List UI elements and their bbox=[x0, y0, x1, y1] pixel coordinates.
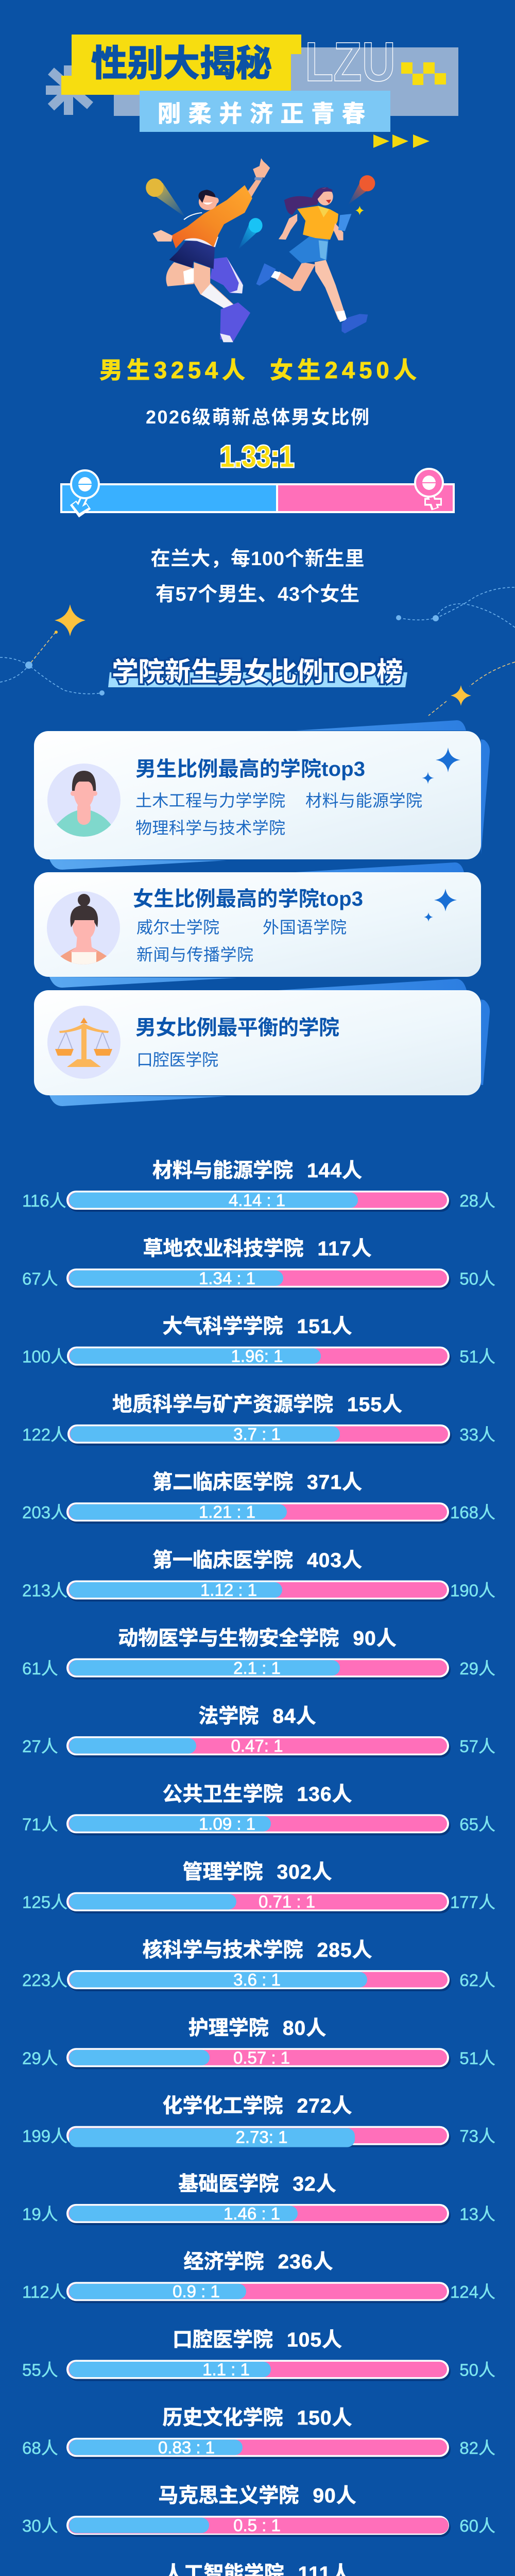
college row: 口腔医学院 bbox=[22, 2329, 495, 2381]
subhead: overall ratio label: 2026级萌新总体男女比例 bbox=[146, 406, 369, 428]
gender bar bbox=[66, 2126, 451, 2147]
male count: 19人 bbox=[22, 2205, 58, 2224]
pin: red bbox=[348, 175, 375, 205]
female count: 51人 bbox=[459, 1347, 495, 1366]
male count: 122人 bbox=[22, 1425, 67, 1444]
avatar: male bbox=[47, 764, 121, 837]
male count: 100人 bbox=[22, 1347, 67, 1366]
female count: 60人 bbox=[459, 2516, 495, 2535]
female count: 33人 bbox=[459, 1425, 495, 1444]
female count: 177人 bbox=[450, 1893, 495, 1912]
gender bar: 0.47: 1 bbox=[231, 1736, 283, 1755]
female count: 62人 bbox=[459, 1971, 495, 1990]
female count: 168人 bbox=[450, 1503, 495, 1522]
decorative asterisk bbox=[46, 65, 91, 115]
college row: 核科学与技术学院 bbox=[22, 1939, 495, 1991]
heading: college ranking: 学院新生男女比例TOP榜 bbox=[112, 657, 403, 687]
gender bar: 1.96: 1 bbox=[231, 1347, 283, 1366]
male count: 199人 bbox=[22, 2127, 67, 2146]
gender bar: 4.14 : 1 bbox=[229, 1191, 285, 1210]
college list: 新闻与传播学院 bbox=[136, 945, 253, 964]
header banner bbox=[46, 30, 458, 148]
gender bar bbox=[66, 1814, 451, 1835]
male count: 116人 bbox=[22, 1191, 66, 1210]
gender bar: 3.7 : 1 bbox=[233, 1425, 281, 1444]
college row: 材料与能源学院 bbox=[22, 1160, 495, 1212]
main title: 性别大揭秘 bbox=[91, 43, 272, 83]
female count: 124人 bbox=[450, 2282, 495, 2301]
male count: 29人 bbox=[22, 2048, 58, 2067]
college name and total: 动物医学与生物安全学院 90人 bbox=[118, 1628, 397, 1650]
college name and total: 法学院 84人 bbox=[198, 1705, 317, 1727]
gender bar: 3.6 : 1 bbox=[233, 1970, 281, 1989]
college name and total: 化学化工学院 272人 bbox=[162, 2095, 353, 2117]
college row: 基础医学院 bbox=[22, 2173, 495, 2225]
icon: scale bbox=[47, 1006, 121, 1079]
female count: 57人 bbox=[459, 1737, 495, 1756]
headline: male and female totals: 女生2450人 bbox=[270, 357, 417, 383]
college row: 管理学院 bbox=[22, 1861, 495, 1913]
pin: blue bbox=[238, 218, 263, 249]
college row: 化学化工学院 bbox=[22, 2095, 495, 2147]
illustration: two students jumping and running bbox=[146, 158, 375, 342]
yellow triangles arrow bbox=[373, 134, 430, 148]
college name: 口腔医学院 bbox=[136, 1050, 218, 1069]
panel: most balanced college bbox=[34, 979, 490, 1106]
female count: 29人 bbox=[459, 1659, 495, 1678]
yellow title block bbox=[61, 35, 301, 95]
female count: 51人 bbox=[459, 2048, 495, 2067]
college row: 马克思主义学院 bbox=[22, 2485, 495, 2537]
college list: 土木工程与力学学院 bbox=[135, 791, 285, 810]
college row: 护理学院 bbox=[22, 2017, 495, 2069]
avatar: female bbox=[47, 891, 120, 971]
female count: 73人 bbox=[459, 2127, 495, 2146]
text: per 100 freshmen bbox=[150, 548, 365, 605]
college row: 草地农业科技学院 bbox=[22, 1238, 495, 1290]
college name and total: 历史文化学院 150人 bbox=[162, 2407, 353, 2429]
male count: 71人 bbox=[22, 1815, 58, 1834]
pin: yellow bbox=[146, 178, 185, 217]
male count: 67人 bbox=[22, 1269, 58, 1288]
gender bar bbox=[66, 2282, 451, 2303]
college list: 外国语学院 bbox=[263, 918, 347, 937]
college name and total: 经济学院 236人 bbox=[183, 2251, 334, 2273]
gender bar: 0.5 : 1 bbox=[233, 2516, 281, 2535]
college name and total: 地质科学与矿产资源学院 155人 bbox=[112, 1394, 403, 1416]
text: per 100 freshmen: 有57个男生、43个女生 bbox=[156, 584, 359, 605]
college name and total: 大气科学学院 151人 bbox=[162, 1316, 353, 1338]
gender bar: 1.46 : 1 bbox=[224, 2204, 280, 2223]
gender bar: 1.21 : 1 bbox=[199, 1502, 255, 1521]
male count: 68人 bbox=[22, 2438, 58, 2458]
college name and total: 护理学院 80人 bbox=[188, 2017, 327, 2039]
female count: 190人 bbox=[450, 1581, 495, 1600]
female count: 28人 bbox=[459, 1191, 495, 1210]
gender bar bbox=[66, 2516, 451, 2537]
yellow checker squares bbox=[401, 62, 446, 85]
college list bbox=[136, 918, 347, 964]
college name and total: 第一临床医学院 403人 bbox=[152, 1550, 363, 1571]
gender bar: 1.09 : 1 bbox=[199, 1814, 255, 1833]
college list bbox=[135, 791, 422, 837]
boy figure bbox=[153, 158, 270, 342]
college name and total: 核科学与技术学院 285人 bbox=[142, 1939, 373, 1961]
card title: 男女比例最平衡的学院 bbox=[135, 1016, 339, 1039]
male count: 203人 bbox=[22, 1503, 67, 1522]
gender bar bbox=[66, 2204, 451, 2225]
gender bar: 0.57 : 1 bbox=[233, 2048, 290, 2067]
gender bar: 1.34 : 1 bbox=[199, 1268, 255, 1287]
college name and total: 第二临床医学院 371人 bbox=[152, 1471, 363, 1494]
gender bar bbox=[67, 1425, 452, 1446]
icon: male symbol bbox=[71, 470, 99, 512]
college row: 公共卫生学院 bbox=[22, 1783, 495, 1835]
college row: 地质科学与矿产资源学院 bbox=[22, 1394, 495, 1446]
subtitle block bbox=[140, 91, 390, 132]
male count: 125人 bbox=[22, 1893, 67, 1912]
male count: 27人 bbox=[22, 1737, 58, 1756]
gender bar bbox=[67, 1347, 451, 1368]
LZU outline wordmark: LZU bbox=[305, 30, 396, 93]
college name and total: 草地农业科技学院 117人 bbox=[143, 1238, 372, 1260]
college row: 第二临床医学院 bbox=[22, 1471, 495, 1523]
sparkle bbox=[355, 206, 364, 215]
icon: female symbol bbox=[415, 469, 443, 509]
gender bar bbox=[66, 1658, 451, 1680]
college name and total: 马克思主义学院 90人 bbox=[158, 2485, 357, 2507]
college name and total: 材料与能源学院 144人 bbox=[152, 1160, 363, 1182]
female count: 13人 bbox=[459, 2205, 495, 2224]
male count: 61人 bbox=[22, 1659, 58, 1678]
college list: 物理科学与技术学院 bbox=[135, 819, 285, 837]
college row: 历史文化学院 bbox=[22, 2407, 495, 2459]
college name and total: 管理学院 302人 bbox=[182, 1861, 333, 1884]
college name and total: 公共卫生学院 136人 bbox=[162, 1783, 353, 1805]
college name and total: 口腔医学院 105人 bbox=[173, 2329, 342, 2351]
gender bar bbox=[66, 1581, 451, 1601]
male count: 213人 bbox=[22, 1581, 67, 1600]
gender bar: 2.73: 1 bbox=[236, 2128, 287, 2147]
gender bar bbox=[66, 2360, 451, 2381]
overall ratio value: 1.33:1 bbox=[220, 440, 294, 473]
girl figure bbox=[256, 187, 368, 333]
decoration: stars and dashed orbits bbox=[0, 587, 515, 716]
college list: 威尔士学院 bbox=[136, 918, 219, 937]
gender bar bbox=[66, 1892, 451, 1913]
pale backing block bbox=[114, 47, 458, 116]
sparkles bbox=[424, 889, 457, 922]
college row: 经济学院 bbox=[22, 2251, 495, 2303]
headline: male and female totals bbox=[99, 357, 417, 383]
male count: 223人 bbox=[22, 1971, 67, 1990]
male count: 55人 bbox=[22, 2361, 58, 2379]
gender bar: 0.71 : 1 bbox=[259, 1892, 315, 1911]
college row: 法学院 bbox=[22, 1705, 495, 1757]
gender bar bbox=[66, 1191, 451, 1212]
male count: 30人 bbox=[22, 2516, 58, 2535]
gender bar: 2.1 : 1 bbox=[233, 1658, 281, 1677]
gender bar bbox=[66, 2048, 451, 2069]
gender bar bbox=[66, 1502, 451, 1523]
card title: 男生比例最高的学院top3 bbox=[135, 758, 365, 781]
gender bar bbox=[66, 1736, 451, 1757]
college list: 材料与能源学院 bbox=[305, 791, 422, 810]
female count: 65人 bbox=[459, 1815, 495, 1834]
female count: 50人 bbox=[459, 1269, 495, 1288]
panel: female highest top3 bbox=[34, 862, 481, 988]
college name and total: 基础医学院 32人 bbox=[178, 2173, 337, 2195]
gender bar bbox=[66, 2438, 451, 2459]
sparkles bbox=[422, 748, 460, 784]
college row: 动物医学与生物安全学院 bbox=[22, 1628, 495, 1680]
panel: male highest top3 bbox=[34, 720, 490, 870]
headline: male and female totals: 男生3254人 bbox=[99, 357, 245, 383]
text: per 100 freshmen: 在兰大，每100个新生里 bbox=[150, 548, 365, 570]
card title: 女生比例最高的学院top3 bbox=[133, 888, 363, 910]
gender bar bbox=[66, 1268, 451, 1290]
subtitle: 刚柔并济正青春 bbox=[158, 100, 365, 127]
male count: 112人 bbox=[22, 2282, 66, 2301]
gender bar: 1.1 : 1 bbox=[202, 2360, 250, 2379]
overall ratio bar bbox=[60, 469, 455, 513]
gender bar: 1.12 : 1 bbox=[200, 1581, 257, 1599]
college row: 第一临床医学院 bbox=[22, 1550, 495, 1601]
gender bar: 0.9 : 1 bbox=[173, 2282, 220, 2301]
college row: 大气科学学院 bbox=[22, 1316, 495, 1368]
female count: 82人 bbox=[459, 2438, 495, 2458]
gender bar bbox=[67, 1970, 451, 1991]
female count: 50人 bbox=[459, 2361, 495, 2379]
gender bar: 0.83 : 1 bbox=[158, 2438, 215, 2457]
